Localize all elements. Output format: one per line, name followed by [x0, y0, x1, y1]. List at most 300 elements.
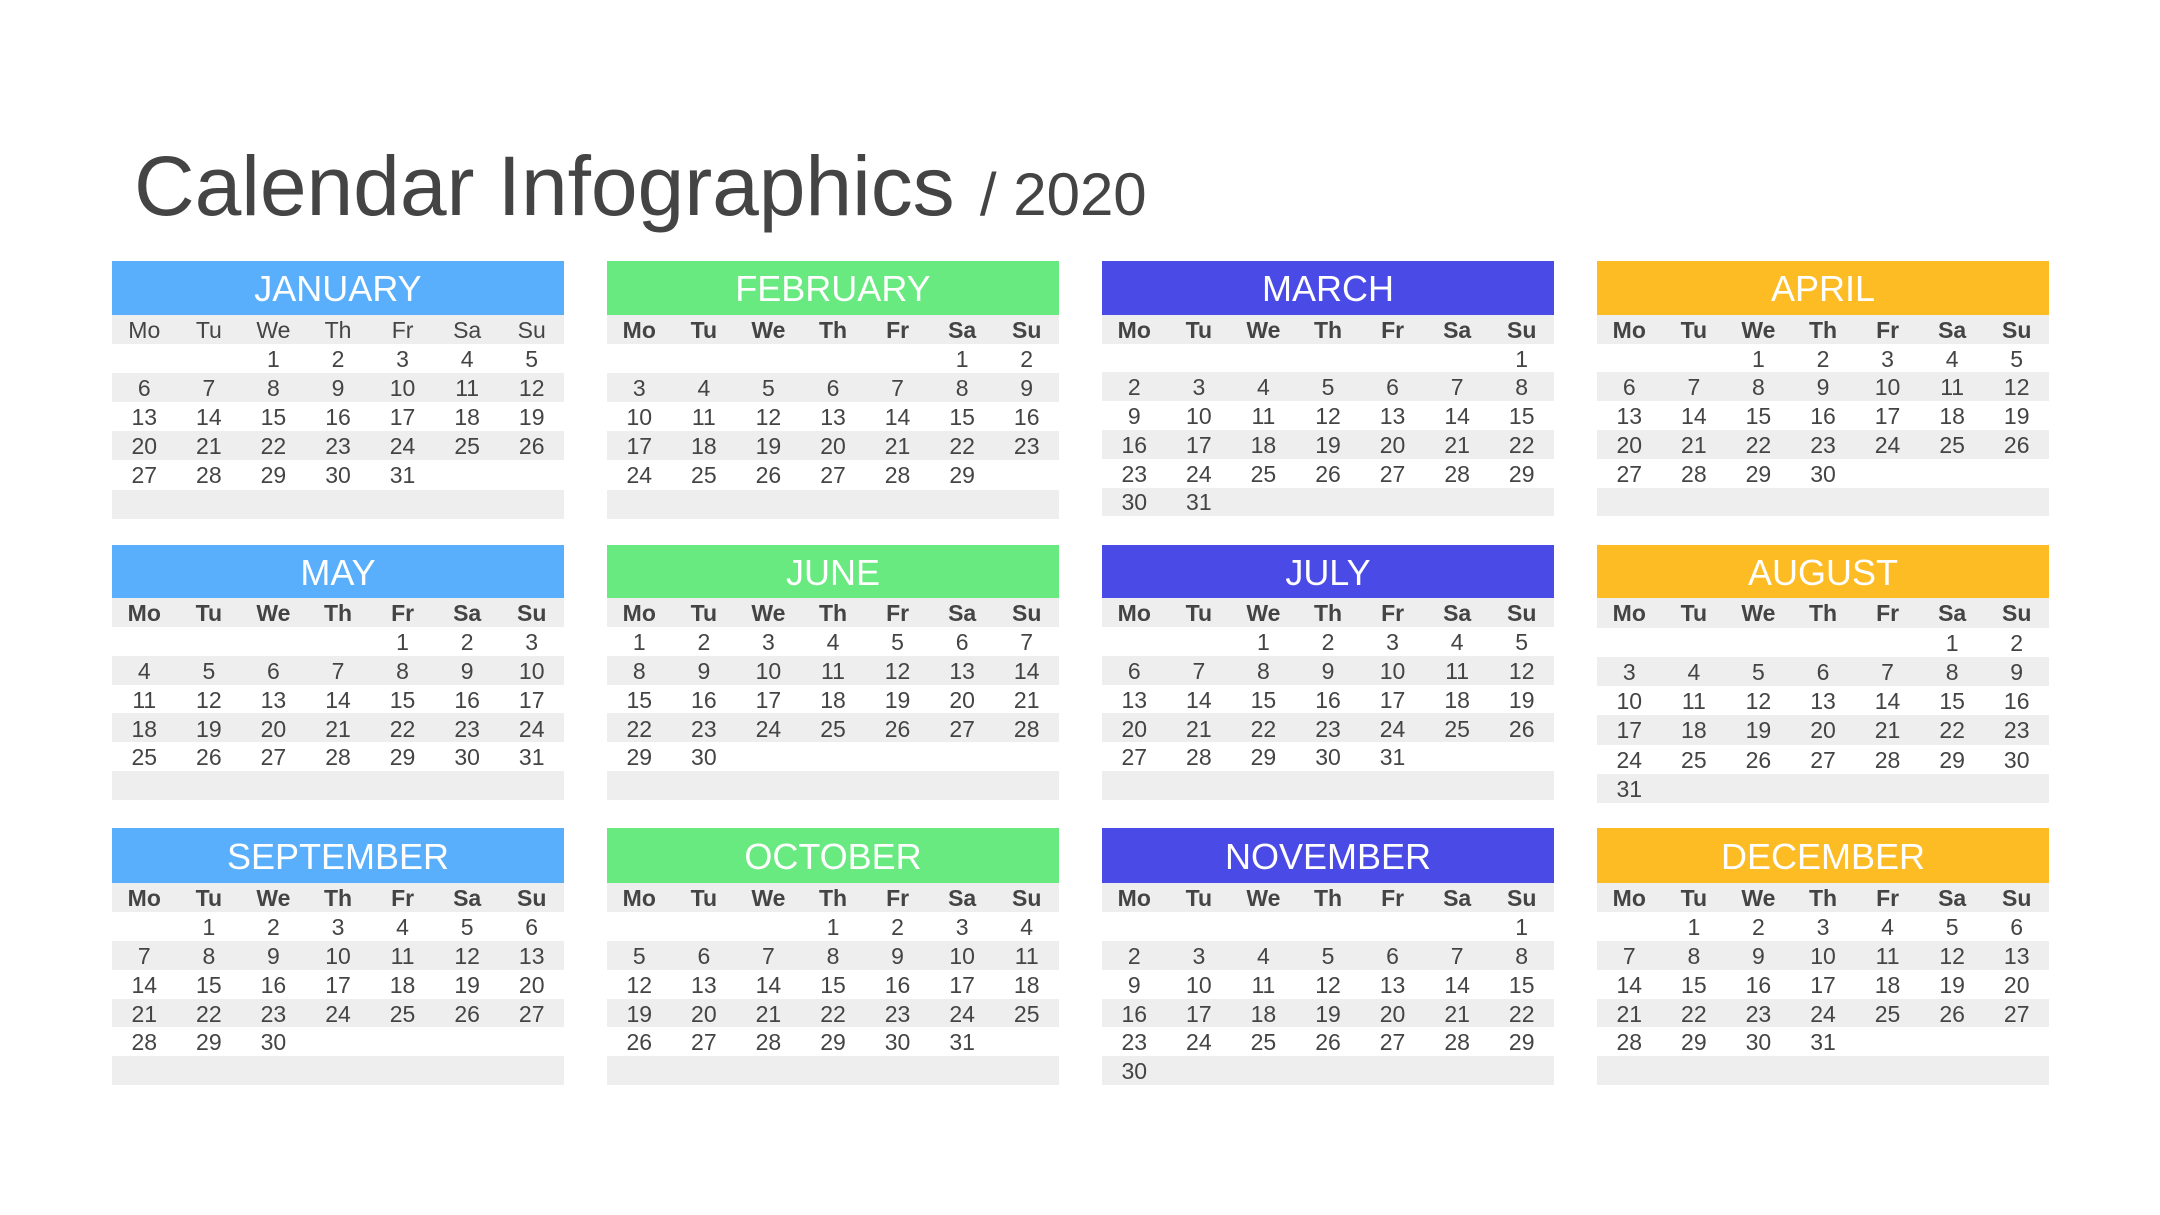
- weekday row: Mo: [128, 885, 161, 911]
- panel: November: 12: [1315, 972, 1341, 998]
- date rows: 4: [1946, 346, 1959, 372]
- date rows: 5: [1515, 629, 1528, 655]
- panel: May: [112, 545, 564, 800]
- panel: December: 30: [1746, 1029, 1771, 1055]
- panel: December: 9: [1752, 943, 1765, 969]
- weekday row: [1102, 883, 1554, 912]
- panel: February: 15: [949, 404, 975, 430]
- date rows: [202, 914, 538, 940]
- panel: May: 17: [519, 687, 544, 713]
- panel: November: 28: [1444, 1029, 1470, 1055]
- heading: October: OCTOBER: [744, 836, 922, 877]
- panel: October: 16: [885, 972, 910, 998]
- panel: November: 27: [1380, 1029, 1405, 1055]
- panel: January: 19: [519, 404, 544, 430]
- panel: July: 20: [1121, 716, 1147, 742]
- panel: August: 5: [1752, 659, 1765, 685]
- panel: February: 4: [697, 375, 710, 401]
- panel: March: 21: [1444, 432, 1470, 458]
- date rows: 6: [525, 914, 538, 940]
- date rows: [1257, 629, 1528, 655]
- panel: August: 18: [1681, 717, 1707, 743]
- panel: February: 27: [820, 462, 846, 488]
- panel: May: 23: [454, 716, 480, 742]
- panel: January: 9: [332, 375, 344, 401]
- weekday row: Tu: [196, 600, 222, 626]
- panel: June: 10: [756, 658, 781, 684]
- weekday row: Th: [1314, 600, 1342, 626]
- panel: September: 12: [454, 943, 480, 969]
- panel: June: [607, 545, 1059, 800]
- heading: May: [112, 545, 564, 598]
- weekday row: [1597, 883, 2049, 912]
- panel: January: 22: [261, 433, 286, 459]
- panel: March: 16: [1121, 432, 1147, 458]
- panel: May: 24: [519, 716, 544, 742]
- heading: May: MAY: [300, 552, 376, 593]
- panel: July: 26: [1509, 716, 1534, 742]
- weekday row: Tu: [1186, 600, 1212, 626]
- panel: August: 13: [1810, 688, 1836, 714]
- panel: August: 12: [1746, 688, 1771, 714]
- date rows: [1752, 346, 2023, 372]
- panel: July: 27: [1121, 744, 1147, 770]
- panel: March: 17: [1186, 432, 1212, 458]
- panel: July: 16: [1315, 687, 1341, 713]
- date rows: [1687, 914, 2023, 940]
- panel: April: 20: [1616, 432, 1642, 458]
- weekday row: Fr: [1381, 317, 1404, 343]
- date rows: 7: [1020, 629, 1033, 655]
- weekday row: Su: [517, 600, 546, 626]
- weekday row: We: [256, 600, 290, 626]
- panel: December: 10: [1810, 943, 1836, 969]
- panel: May: 22: [390, 716, 415, 742]
- panel: June: 19: [885, 687, 910, 713]
- panel: May: 9: [461, 658, 474, 684]
- panel: November: 14: [1444, 972, 1470, 998]
- panel: January: 23: [325, 433, 351, 459]
- panel: December: 14: [1616, 972, 1642, 998]
- panel: August: [1597, 545, 2049, 803]
- panel: July: 17: [1380, 687, 1405, 713]
- weekday row: Mo: [623, 316, 656, 342]
- panel: September: 21: [131, 1001, 157, 1027]
- panel: July: 29: [1251, 744, 1276, 770]
- date rows: 4: [827, 629, 839, 655]
- panel: April: 28: [1681, 461, 1707, 487]
- weekday row: Fr: [1876, 600, 1899, 626]
- panel: December: 28: [1616, 1029, 1642, 1055]
- panel: October: [607, 828, 1059, 1085]
- panel: November: 22: [1509, 1001, 1534, 1027]
- panel: October: 27: [691, 1029, 717, 1055]
- weekday row: Fr: [1876, 317, 1899, 343]
- panel: September: 10: [325, 943, 351, 969]
- weekday row: Su: [2002, 317, 2031, 343]
- panel: December: 8: [1687, 943, 1700, 969]
- panel: September: 17: [325, 972, 351, 998]
- panel: December: 23: [1746, 1001, 1771, 1027]
- date rows: 3: [1386, 629, 1399, 655]
- panel: April: 17: [1875, 403, 1900, 429]
- date rows: 4: [1881, 914, 1894, 940]
- heading: December: DECEMBER: [1721, 836, 1925, 877]
- panel: March: 22: [1509, 432, 1534, 458]
- panel: November: 21: [1444, 1001, 1470, 1027]
- panel: November: 3: [1192, 943, 1205, 969]
- panel: October: 7: [762, 943, 775, 969]
- date rows: [267, 346, 538, 372]
- panel: July: 24: [1380, 716, 1405, 742]
- weekday row: Fr: [886, 885, 909, 911]
- panel: November: 18: [1251, 1001, 1276, 1027]
- weekday row: [112, 315, 564, 344]
- panel: April: [1597, 261, 2049, 516]
- date rows: 3: [956, 914, 969, 940]
- panel: April: 18: [1939, 403, 1965, 429]
- weekday row: Tu: [196, 316, 222, 342]
- weekday row: Sa: [1938, 600, 1966, 626]
- panel: August: 25: [1681, 747, 1707, 773]
- panel: January: 15: [261, 404, 286, 430]
- panel: June: 16: [691, 687, 717, 713]
- panel: October: 15: [820, 972, 846, 998]
- date rows: 3: [396, 346, 409, 372]
- panel: April: 14: [1681, 403, 1707, 429]
- panel: July: 19: [1509, 687, 1534, 713]
- panel: April: 13: [1616, 403, 1642, 429]
- panel: April: 23: [1810, 432, 1836, 458]
- panel: August: 14: [1875, 688, 1900, 714]
- panel: December: 22: [1681, 1001, 1707, 1027]
- weekday row: We: [1246, 317, 1280, 343]
- weekday row: Mo: [623, 885, 656, 911]
- panel: November: 7: [1451, 943, 1464, 969]
- weekday row: Tu: [1186, 317, 1212, 343]
- panel: September: 7: [138, 943, 151, 969]
- panel: January: 18: [454, 404, 480, 430]
- panel: March: 29: [1509, 461, 1534, 487]
- panel: March: 30: [1121, 489, 1147, 515]
- panel: January: 30: [325, 462, 351, 488]
- date rows: [396, 629, 538, 655]
- panel: March: 27: [1380, 461, 1405, 487]
- panel: July: 11: [1445, 658, 1469, 684]
- date rows: 1: [396, 629, 409, 655]
- weekday row: Tu: [1186, 885, 1212, 911]
- weekday row: Mo: [128, 316, 160, 342]
- weekday row: Fr: [391, 600, 414, 626]
- weekday row: Fr: [886, 316, 909, 342]
- panel: September: 13: [519, 943, 544, 969]
- panel: July: 10: [1380, 658, 1405, 684]
- weekday row: Su: [2002, 600, 2031, 626]
- panel: February: 25: [691, 462, 717, 488]
- panel: May: 16: [454, 687, 480, 713]
- weekday row: Tu: [691, 600, 717, 626]
- panel: January: [112, 261, 564, 519]
- date rows: 1: [1687, 914, 1700, 940]
- weekday row: Th: [819, 600, 847, 626]
- panel: September: 26: [454, 1001, 480, 1027]
- panel: October: 26: [626, 1029, 652, 1055]
- panel: August: 7: [1881, 659, 1894, 685]
- panel: May: 19: [196, 716, 222, 742]
- heading: June: [607, 545, 1059, 598]
- panel: August: 10: [1616, 688, 1642, 714]
- panel: December: 26: [1939, 1001, 1965, 1027]
- panel: May: 13: [261, 687, 286, 713]
- panel: March: 12: [1315, 403, 1341, 429]
- panel: September: 15: [196, 972, 222, 998]
- panel: October: 5: [633, 943, 646, 969]
- panel: December: 29: [1681, 1029, 1707, 1055]
- weekday row: Su: [1012, 600, 1041, 626]
- date rows: 1: [633, 629, 646, 655]
- panel: October: 21: [756, 1001, 781, 1027]
- panel: May: 6: [267, 658, 280, 684]
- panel: February: 17: [626, 433, 652, 459]
- heading: February: [607, 261, 1059, 315]
- weekday row: Tu: [691, 316, 717, 342]
- panel: August: 19: [1746, 717, 1771, 743]
- panel: June: 8: [633, 658, 646, 684]
- panel: September: 30: [261, 1029, 286, 1055]
- panel: March: 8: [1515, 374, 1528, 400]
- panel: April: 11: [1940, 374, 1964, 400]
- weekday row: Th: [1314, 317, 1342, 343]
- panel: October: 10: [949, 943, 975, 969]
- panel: September: 14: [131, 972, 157, 998]
- weekday row: [607, 883, 1059, 912]
- panel: June: 22: [626, 716, 652, 742]
- panel: February: 24: [626, 462, 652, 488]
- heading: March: [1102, 261, 1554, 315]
- weekday row: Sa: [453, 600, 481, 626]
- panel: October: 18: [1014, 972, 1040, 998]
- panel: July: 30: [1315, 744, 1341, 770]
- heading: March: MARCH: [1262, 268, 1394, 309]
- panel: October: 31: [949, 1029, 975, 1055]
- weekday row: Mo: [1613, 600, 1646, 626]
- weekday row: Su: [518, 316, 546, 342]
- panel: August: 22: [1939, 717, 1965, 743]
- heading: April: [1597, 261, 2049, 315]
- panel: October: 25: [1014, 1001, 1040, 1027]
- weekday row: Mo: [1613, 885, 1646, 911]
- panel: January: 31: [390, 462, 415, 488]
- panel: September: 23: [261, 1001, 286, 1027]
- panel: February: 23: [1014, 433, 1040, 459]
- panel: February: 16: [1014, 404, 1040, 430]
- panel: March: 14: [1444, 403, 1470, 429]
- panel: April: 29: [1746, 461, 1771, 487]
- panel: September: 18: [390, 972, 415, 998]
- panel: February: 6: [827, 375, 839, 401]
- panel: November: 11: [1251, 972, 1275, 998]
- panel: January: 25: [454, 433, 480, 459]
- panel: May: 5: [202, 658, 215, 684]
- panel: August: 26: [1746, 747, 1771, 773]
- date rows: 2: [697, 629, 710, 655]
- date rows: 1: [1515, 346, 1528, 372]
- panel: August: 9: [2010, 659, 2023, 685]
- panel: August: 31: [1616, 776, 1642, 802]
- weekday row: Sa: [1443, 317, 1471, 343]
- panel: December: 11: [1876, 943, 1900, 969]
- date rows: 2: [1752, 914, 1765, 940]
- panel: February: 13: [820, 404, 846, 430]
- title: Calendar Infographics / 2020: [134, 139, 1147, 233]
- panel: May: 27: [261, 744, 286, 770]
- panel: August: 29: [1939, 747, 1965, 773]
- panel: March: 3: [1192, 374, 1205, 400]
- panel: November: 9: [1128, 972, 1141, 998]
- date rows: 1: [1257, 629, 1270, 655]
- weekday row: We: [1246, 600, 1280, 626]
- weekday row: Sa: [453, 885, 481, 911]
- panel: February: 21: [885, 433, 910, 459]
- panel: May: 10: [519, 658, 544, 684]
- panel: March: 5: [1322, 374, 1334, 400]
- panel: October: 12: [626, 972, 652, 998]
- panel: June: 15: [626, 687, 652, 713]
- panel: July: 31: [1380, 744, 1405, 770]
- panel: January: 13: [131, 404, 157, 430]
- date rows: 4: [461, 346, 474, 372]
- panel: July: 7: [1192, 658, 1205, 684]
- panel: June: 30: [691, 744, 717, 770]
- weekday row: Sa: [948, 600, 976, 626]
- date rows: 3: [525, 629, 538, 655]
- weekday row: [1597, 598, 2049, 628]
- panel: November: 19: [1315, 1001, 1341, 1027]
- panel: August: 15: [1939, 688, 1965, 714]
- panel: October: 14: [756, 972, 781, 998]
- weekday row: Tu: [1681, 885, 1707, 911]
- panel: March: 4: [1257, 374, 1270, 400]
- panel: February: 14: [885, 404, 910, 430]
- weekday row: Fr: [392, 316, 413, 342]
- weekday row: Tu: [196, 885, 222, 911]
- panel: February: 26: [756, 462, 781, 488]
- panel: February: 10: [626, 404, 652, 430]
- panel: July: 22: [1251, 716, 1276, 742]
- panel: June: 21: [1014, 687, 1040, 713]
- panel: May: 14: [325, 687, 351, 713]
- date rows: 2: [2010, 630, 2023, 656]
- date rows: 5: [2010, 346, 2023, 372]
- weekday row: We: [256, 885, 290, 911]
- panel: October: 30: [885, 1029, 910, 1055]
- panel: March: 10: [1186, 403, 1212, 429]
- heading: June: JUNE: [786, 552, 880, 593]
- heading: October: [607, 828, 1059, 883]
- panel: August: 4: [1687, 659, 1700, 685]
- date rows: 6: [2010, 914, 2023, 940]
- panel: March: 13: [1380, 403, 1405, 429]
- panel: March: 7: [1451, 374, 1464, 400]
- panel: September: 20: [519, 972, 544, 998]
- panel: July: 25: [1444, 716, 1470, 742]
- heading: July: [1102, 545, 1554, 598]
- panel: December: 18: [1875, 972, 1900, 998]
- weekday row: Th: [1314, 885, 1342, 911]
- panel: December: 17: [1810, 972, 1836, 998]
- panel: November: 29: [1509, 1029, 1534, 1055]
- panel: March: 31: [1186, 489, 1212, 515]
- panel: May: 7: [332, 658, 344, 684]
- weekday row: Sa: [948, 316, 976, 342]
- panel: October: 20: [691, 1001, 717, 1027]
- panel: September: 25: [390, 1001, 415, 1027]
- weekday row: Su: [1507, 317, 1536, 343]
- weekday row: [607, 315, 1059, 344]
- panel: August: 6: [1817, 659, 1829, 685]
- panel: November: 23: [1121, 1029, 1147, 1055]
- panel: November: 25: [1251, 1029, 1276, 1055]
- panel: June: 28: [1014, 716, 1040, 742]
- panel: July: 21: [1186, 716, 1212, 742]
- panel: October: 13: [691, 972, 717, 998]
- panel: August: 8: [1946, 659, 1959, 685]
- weekday row: Fr: [1381, 600, 1404, 626]
- panel: April: 8: [1752, 374, 1765, 400]
- panel: April: 21: [1681, 432, 1707, 458]
- panel: November: [1102, 828, 1554, 1085]
- panel: August: 11: [1682, 688, 1706, 714]
- heading: August: [1597, 545, 2049, 598]
- weekday row: Th: [819, 316, 847, 342]
- panel: December: 24: [1810, 1001, 1836, 1027]
- panel: December: 21: [1616, 1001, 1642, 1027]
- panel: January: 8: [267, 375, 280, 401]
- panel: October: 22: [820, 1001, 846, 1027]
- weekday row: Tu: [691, 885, 717, 911]
- weekday row: We: [1741, 600, 1775, 626]
- panel: October: 23: [885, 1001, 910, 1027]
- panel: January: 26: [519, 433, 544, 459]
- weekday row: Sa: [948, 885, 976, 911]
- panel: September: 16: [261, 972, 286, 998]
- panel: May: 21: [325, 716, 351, 742]
- date rows: 3: [332, 914, 344, 940]
- panel: July: 18: [1444, 687, 1470, 713]
- panel: October: 6: [697, 943, 710, 969]
- heading: January: [112, 261, 564, 315]
- panel: March: 19: [1315, 432, 1341, 458]
- weekday row: [112, 598, 564, 627]
- date rows: [956, 346, 1033, 372]
- panel: December: 16: [1746, 972, 1771, 998]
- panel: June: 20: [949, 687, 975, 713]
- date rows: 1: [827, 914, 839, 940]
- panel: July: 6: [1128, 658, 1141, 684]
- date rows: 3: [1881, 346, 1894, 372]
- weekday row: Fr: [886, 600, 909, 626]
- panel: January: 7: [202, 375, 215, 401]
- weekday row: Su: [517, 885, 546, 911]
- panel: August: 27: [1810, 747, 1836, 773]
- panel: March: 2: [1128, 374, 1141, 400]
- panel: October: 17: [949, 972, 975, 998]
- panel: January: 24: [390, 433, 415, 459]
- weekday row: Tu: [1681, 600, 1707, 626]
- panel: November: 16: [1121, 1001, 1147, 1027]
- heading: April: APRIL: [1771, 268, 1875, 309]
- panel: April: 7: [1687, 374, 1700, 400]
